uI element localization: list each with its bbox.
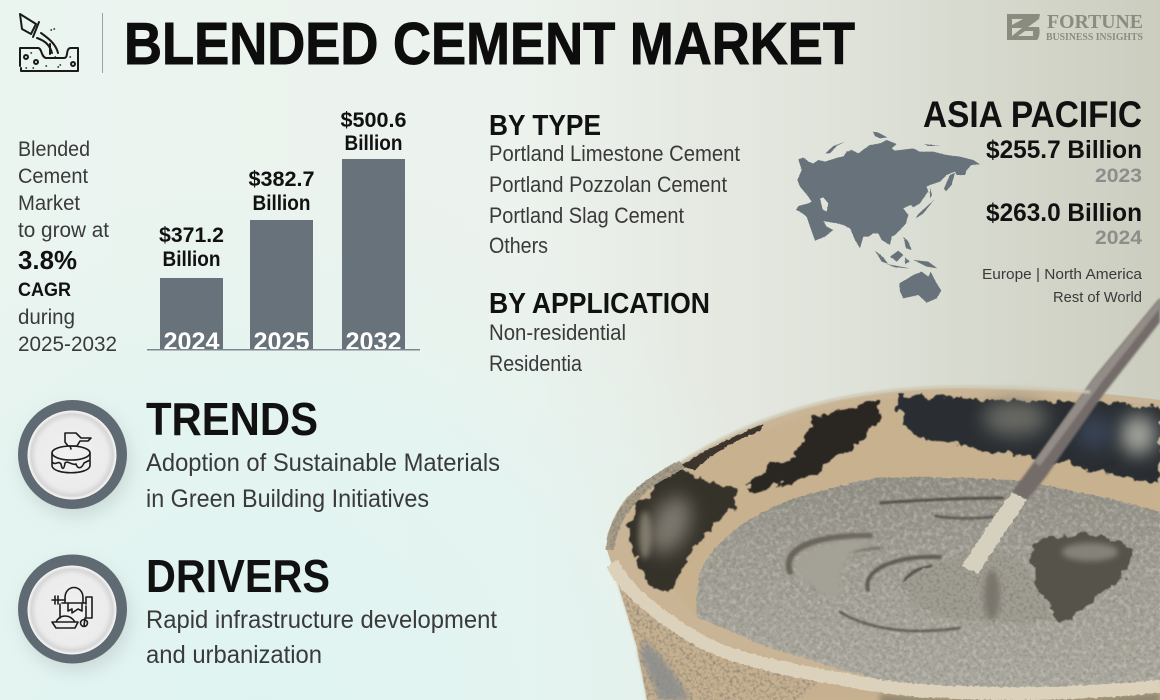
dark stain on right back wall [895,396,1160,483]
panel: Asia Pacific figures: Rest of World [1053,289,1142,306]
panel: Asia Pacific figures: 2023 [1095,166,1142,187]
panel: by type: Portland Limestone Cement [489,141,740,166]
growth text block: 2025-2032 [18,333,117,356]
icon: drivers badge [18,554,130,671]
growth text block: Market [18,192,80,215]
title divider [102,13,103,73]
bar 2032: $500.6 [340,109,406,132]
text: trends description [146,449,500,513]
icon: trends badge [18,400,130,516]
heading: drivers: DRIVERS [146,550,330,602]
panel: by type: BY TYPE [489,110,601,142]
logo: Fortune Business Insights [1007,11,1143,43]
text: drivers description [146,606,497,669]
panel: by type: Portland Pozzolan Cement [489,172,727,197]
panel: by application: BY APPLICATION [489,288,710,320]
panel: by application [489,288,710,376]
panel: Asia Pacific figures: ASIA PACIFIC [923,94,1142,135]
bar 2024: 2024 [164,328,220,356]
icon: pouring cement into a mould [20,14,78,71]
panel: Asia Pacific figures [923,94,1143,306]
heading: trends: TRENDS [146,393,318,445]
text: trends description: in Green Building Initiatives [146,485,429,513]
logo mark [1007,14,1040,40]
growth text block: to grow at [18,219,109,242]
dark streak under left rim [680,424,763,470]
panel: by type: Portland Slag Cement [489,203,684,228]
bar 2024: Billion [162,248,220,271]
text: drivers description: Rapid infrastructure development [146,606,497,634]
panel: Asia Pacific figures: $255.7 Billion [986,136,1142,164]
bar 2024 [159,224,224,356]
panel: Asia Pacific figures: 2024 [1095,228,1142,249]
growth text block: 3.8% [18,245,77,275]
logo subline: BUSINESS INSIGHTS [1046,32,1143,43]
panel: by application: Non-residential [489,320,626,345]
bar 2024: $371.2 [159,224,224,247]
text: drivers description: and urbanization [146,641,322,669]
panel: Asia Pacific figures: $263.0 Billion [986,199,1142,227]
bar 2025 [248,168,314,356]
bar 2032: Billion [344,132,402,155]
panel: Asia Pacific figures: Europe | North America [982,266,1143,283]
panel: by type: Others [489,233,548,258]
growth text block: Cement [18,165,88,188]
blue-grey shadow at bucket base [640,640,690,700]
panel: by application: Residentia [489,351,583,376]
trowel handle [1012,298,1160,500]
bar 2032: 2032 [346,328,402,356]
bar 2025: Billion [252,192,310,215]
cement swirl grooves [789,498,1003,631]
front rim highlight [612,563,1160,694]
left rim texture [610,464,682,550]
growth text block: Blended [18,138,90,161]
growth text block: during [18,306,75,329]
bar chart [147,109,420,356]
bar 2025: $382.7 [248,168,314,191]
dark stain across back wall [747,400,880,493]
logo wordmark: FORTUNE [1047,11,1143,33]
dark hollow beside mound [1032,534,1132,622]
panel: by type [489,110,740,258]
growth text block [18,138,117,356]
photo: bucket of wet cement with trowel handle [607,298,1160,700]
bucket front wall [616,582,1160,700]
top rim highlight [682,387,1090,462]
bar 2032 [340,109,406,356]
cement surface [696,477,1160,692]
bucket outer wall [607,388,1160,700]
smooth swirl band [798,536,872,598]
cement mound [903,548,1052,623]
title: BLENDED CEMENT MARKET [124,11,855,77]
bucket inner beige wall [626,395,1160,620]
map: Asia Pacific [796,132,980,303]
bar 2025: 2025 [254,328,310,356]
dark stain on left inner wall [627,467,737,597]
growth text block: CAGR [18,280,71,301]
trowel handle, cement-coated end [962,492,1027,574]
text: trends description: Adoption of Sustainable Materials [146,449,500,477]
